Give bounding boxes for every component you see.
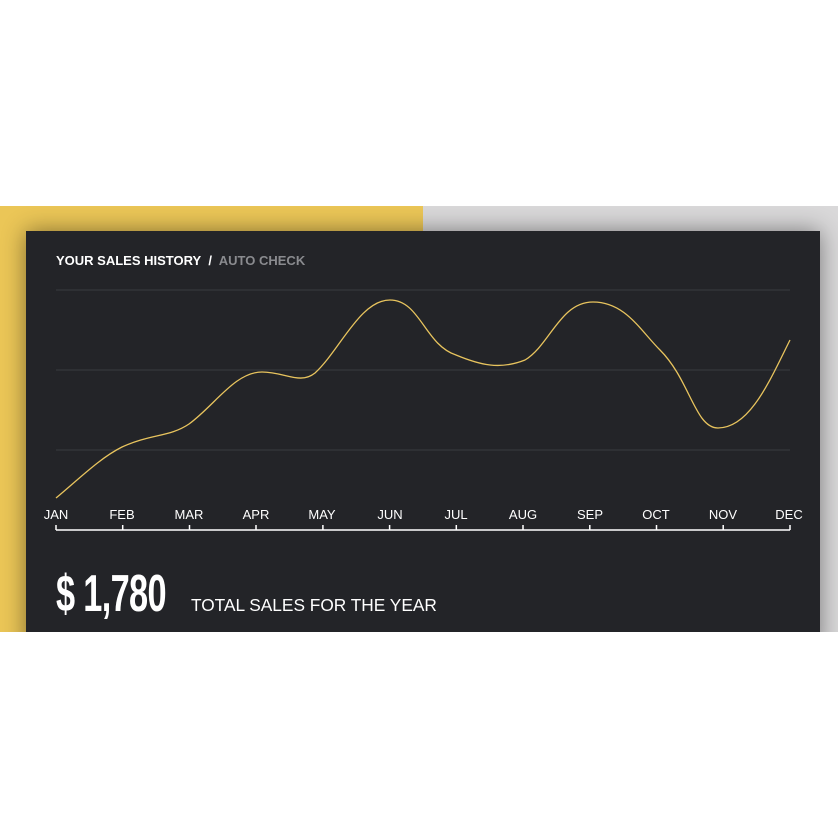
total sales figure: $ 1,780 [56,565,166,623]
background band: grey [423,206,838,632]
line chart: NOV [709,507,737,522]
background area clip [0,206,838,632]
total sales figure: TOTAL SALES FOR THE YEAR [191,595,437,615]
line chart: FEB [109,507,135,522]
line chart: JUL [444,507,468,522]
line chart: MAR [175,507,203,522]
panel: sales chart card [26,231,820,651]
heading: YOUR SALES HISTORY / AUTO CHECK [56,253,305,268]
line chart: SEP [577,507,603,522]
line chart: JUN [377,507,403,522]
line chart: APR [243,507,269,522]
line chart: OCT [642,507,670,522]
line chart: JAN [44,507,68,522]
line chart [44,290,803,531]
total sales figure [56,565,437,623]
background band: yellow [0,206,423,632]
line chart: DEC [775,507,803,522]
line chart: MAY [308,507,336,522]
line chart: AUG [509,507,537,522]
